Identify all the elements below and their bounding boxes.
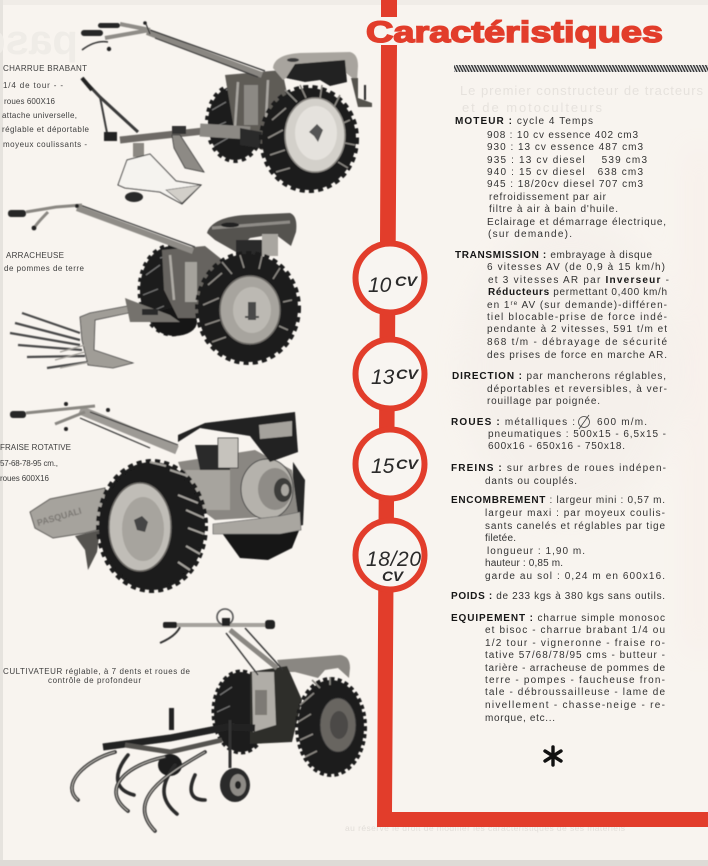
spec: moteur: 908 : 10 cv essence 402 cm3: [487, 130, 638, 141]
spec: transmission: Réducteurs permettant 0,400 km/h: [488, 287, 667, 298]
spec: equipement: morque, etc...: [485, 713, 555, 724]
spec: freins: [451, 463, 666, 487]
badge: 13 CV: CV: [396, 366, 420, 382]
digger blade and bars: [10, 298, 180, 368]
coulter: [172, 135, 204, 172]
front bar: [213, 512, 301, 534]
near wheel: [298, 677, 364, 774]
handlebar: [160, 609, 283, 675]
show-through text from reverse page: et de motoculteurs: [462, 100, 602, 115]
near wheel: [262, 85, 356, 190]
spec: poids: POIDS : de 233 kgs à 380 kgs sans outils.: [451, 591, 665, 602]
spec: transmission: [455, 250, 669, 361]
spec: moteur: MOTEUR : cycle 4 Temps: [455, 116, 593, 127]
spec: moteur: 945 : 18/20cv diesel 707 cm3: [487, 179, 643, 190]
badge: 13 CV: 13: [371, 366, 395, 389]
show-through text from reverse page: au réserve le droit de modifier les caractéristiques de ses matériels: [345, 823, 625, 833]
asterisk ornament: [545, 747, 561, 765]
spec: transmission: AV (sur demande)-différen-: [518, 300, 667, 311]
frame and engine: [250, 666, 302, 744]
spec: equipement: tative 57/68/78/95 cms - butteur -: [485, 650, 665, 661]
rear attachment: [364, 85, 366, 100]
badge: 18/20 CV: CV: [382, 568, 405, 584]
badge: 10 CV: CV: [395, 273, 419, 289]
plough share: [118, 154, 201, 204]
rotary tiller cover: PASQUALI: [36, 506, 83, 528]
caption: fraise rotative: roues 600X16: [0, 474, 50, 483]
spec: moteur: 930 : 13 cv essence 487 cm3: [487, 142, 643, 153]
spec: equipement: 1/2 tour - vigneronne - fraise ro-: [485, 638, 665, 649]
caption: fraise rotative: FRAISE ROTATIVE: [0, 443, 71, 452]
rear engine block: [225, 70, 295, 150]
spec: transmission: et 3 vitesses AR par Inverseur -: [488, 275, 669, 286]
spec: encombrement: sants canelés et réglables par tige: [485, 521, 665, 532]
spec: moteur: (sur demande).: [488, 229, 572, 240]
spec: equipement: terre - pompes - faucheuse fron-: [485, 675, 665, 686]
badge: 18/20 CV: 18/20: [366, 548, 421, 571]
spec: roues: [451, 415, 666, 452]
spec: equipement: et bisoc - charrue brabant 1/4 ou: [485, 625, 665, 636]
spec: moteur: 935 : 13 cv diesel 539 cm3: [487, 155, 647, 166]
spec: direction: déportables et reversibles, à ver-: [487, 384, 667, 395]
spec: direction: rouillage par poignée.: [487, 396, 600, 407]
spec: transmission: pendante à 2 vitesses, 591 t/m et: [487, 324, 667, 335]
caption: cultivateur: [3, 667, 191, 685]
spec: equipement: nivellement - chasse-neige - re-: [485, 700, 665, 711]
spec: roues: 600 m/m.: [597, 417, 647, 428]
caption: charrue brabant: moyeux coulissants -: [3, 140, 87, 149]
spec: freins: dants ou couplés.: [485, 476, 577, 487]
spec: transmission: 868 t/m - débrayage de sécurité: [487, 337, 667, 348]
spec: transmission: re: [510, 300, 518, 307]
spec: encombrement: [451, 495, 665, 582]
badge: 15 CV: [356, 430, 424, 498]
show-through text from reverse page: Le premier constructeur de tracteurs: [460, 83, 704, 98]
spec: encombrement: largeur maxi : par moyeux coulis-: [485, 508, 665, 519]
tractor 3: fraise rotative: [10, 402, 305, 590]
spec: equipement: tarière - arracheuse de pommes de: [485, 663, 665, 674]
badge: 10 CV: 10: [368, 274, 392, 297]
spec: moteur: refroidissement par air: [489, 192, 607, 203]
badge: 10 CV: [356, 244, 424, 312]
rotary tiller cover: [30, 488, 105, 570]
spec: encombrement: longueur : 1,90 m.: [487, 546, 585, 557]
spec: moteur: Eclairage et démarrage électrique,: [487, 217, 666, 228]
caption: cultivateur: contrôle de profondeur: [48, 676, 141, 685]
caption: fraise rotative: 57-68-78-95 cm.,: [0, 459, 58, 468]
badge: 13 CV: [356, 340, 424, 408]
spec: transmission: en 1: [487, 300, 509, 311]
hood: [207, 213, 296, 252]
spec: direction: [452, 371, 667, 407]
caption: arracheuse: de pommes de terre: [4, 264, 85, 273]
engine: [162, 246, 225, 318]
spec: direction: DIRECTION : par mancherons réglables,: [452, 371, 666, 382]
far wheel: [208, 86, 262, 160]
tractor 2: arracheuse: [8, 204, 298, 368]
badge: 15 CV: CV: [396, 456, 420, 472]
hood: [178, 412, 298, 462]
caption: fraise rotative: [0, 443, 71, 483]
hatched divider: [454, 65, 708, 72]
spec: transmission: des prises de force en marche AR.: [487, 350, 667, 361]
spec: roues: pneumatiques : 500x15 - 6,5x15 -: [488, 429, 666, 440]
spec: transmission: TRANSMISSION : embrayage à disque: [455, 250, 652, 261]
spec: moteur: 940 : 15 cv diesel 638 cm3: [487, 167, 643, 178]
spec: transmission: 6 vitesses AV (de 0,9 à 15 km/h): [487, 262, 665, 273]
caption: charrue brabant: réglable et déportable: [2, 125, 90, 134]
spec: encombrement: garde au sol : 0,24 m en 600x16.: [485, 571, 665, 582]
hood: [273, 52, 358, 82]
spec: equipement: [451, 613, 665, 724]
spec: moteur: [455, 116, 666, 240]
plough beam and arms: [82, 78, 262, 157]
far wheel: [214, 672, 268, 752]
red vertical spine: [381, 0, 397, 17]
badge: 18/20 CV: [356, 520, 424, 590]
spec: encombrement: filetée.: [485, 533, 516, 544]
far wheel: [140, 246, 204, 336]
badge: 15 CV: 15: [371, 455, 395, 478]
tractor 1: charrue brabant: [81, 21, 372, 204]
far wheel: [222, 462, 305, 560]
spec: roues: ROUES : métalliques :: [451, 417, 575, 428]
spec: moteur: filtre à air à bain d'huile.: [489, 204, 618, 215]
handlebar: [8, 204, 195, 251]
caption: charrue brabant: attache universelle,: [2, 111, 77, 120]
spec: equipement: EQUIPEMENT : charrue simple monosoc: [451, 613, 665, 624]
caption: arracheuse: [4, 251, 85, 273]
near wheel: [99, 462, 205, 590]
spec: equipement: tale - débroussailleuse - lame de: [485, 687, 665, 698]
hood: [277, 655, 350, 678]
spec: encombrement: ENCOMBREMENT : largeur mini : 0,57 m.: [451, 495, 665, 506]
caption: charrue brabant: roues 600X16: [4, 97, 56, 106]
gauge wheel: [220, 768, 250, 802]
handlebar: [81, 21, 265, 77]
handlebar: [10, 402, 178, 450]
spec: encombrement: hauteur : 0,85 m.: [485, 558, 563, 569]
caption: charrue brabant: 1/4 de tour - -: [3, 81, 63, 90]
spec: transmission: tiel blocable-prise de force indé-: [487, 312, 667, 323]
caption: charrue brabant: CHARRUE BRABANT: [3, 64, 87, 73]
spec: roues: 600x16 - 650x16 - 750x18.: [488, 441, 625, 452]
tractor 4: cultivateur: [72, 609, 364, 831]
spec: freins: FREINS : sur arbres de roues indépen-: [451, 463, 666, 474]
caption: arracheuse: ARRACHEUSE: [6, 251, 64, 260]
near wheel: [198, 254, 298, 362]
cultivator frame and tines: [72, 708, 255, 831]
title: Caractéristiques: [366, 16, 663, 49]
caption: charrue brabant: [2, 64, 90, 149]
caption: cultivateur: CULTIVATEUR réglable, à 7 dents et roues de: [3, 667, 191, 676]
engine: [178, 450, 298, 520]
red vertical spine lower and bottom bar: [377, 45, 708, 827]
